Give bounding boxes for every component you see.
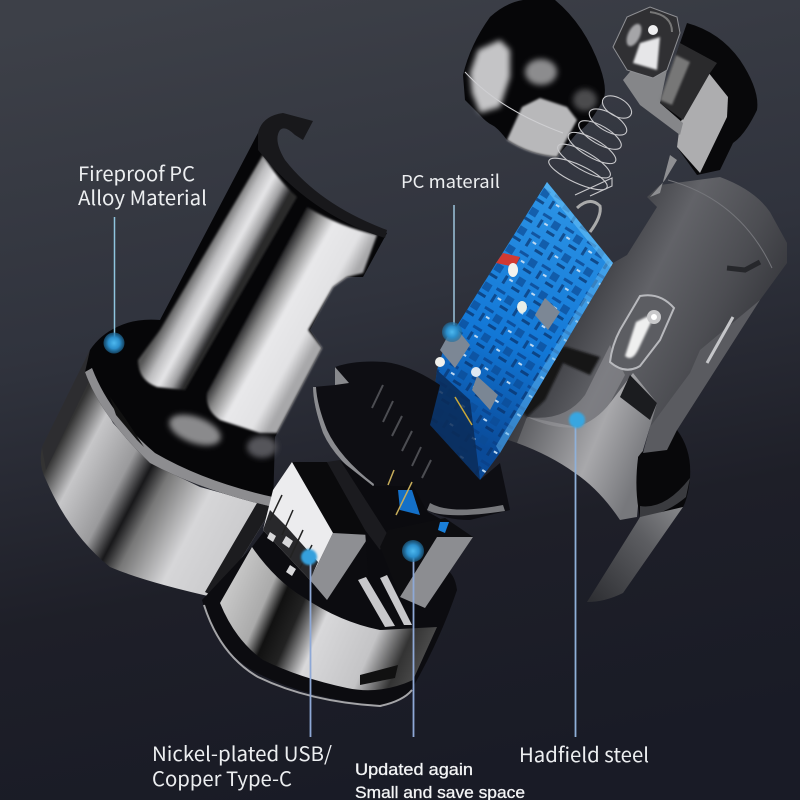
pin disc bbox=[313, 362, 510, 520]
callout: PC materail: PC materail bbox=[401, 168, 500, 194]
spring bbox=[545, 91, 635, 232]
left tube and base top surface bbox=[85, 113, 387, 507]
callout: Hadfield steel bbox=[519, 412, 649, 768]
callout: Nickel-plated USB / Copper Type-C bbox=[152, 549, 332, 792]
right metal shell bbox=[480, 177, 787, 602]
callout: PC materail bbox=[401, 168, 500, 342]
callout: Nickel-plated USB / Copper Type-C: Nickel-plated USB/ bbox=[152, 738, 332, 767]
callout: Nickel-plated USB / Copper Type-C: Copper Type-C bbox=[152, 763, 292, 792]
Type-C port bbox=[327, 460, 473, 627]
top left cap piece bbox=[463, 0, 605, 157]
left base body bbox=[41, 350, 273, 598]
callout: Fireproof PC Alloy Material: Alloy Material bbox=[78, 182, 207, 211]
USB port bbox=[263, 462, 370, 600]
callout: Updated again, Small and save space bbox=[355, 540, 525, 800]
metal bullet tip bbox=[613, 7, 680, 78]
callout: Fireproof PC Alloy Material: Fireproof PC bbox=[78, 158, 195, 187]
lower cap band bbox=[202, 530, 457, 706]
callout: Updated again, Small and save space: Updated again bbox=[355, 761, 473, 779]
callout: Hadfield steel: Hadfield steel bbox=[519, 739, 649, 768]
circuit board bbox=[430, 182, 613, 480]
top right cap piece bbox=[623, 23, 757, 197]
callout: Fireproof PC Alloy Material bbox=[78, 158, 207, 354]
bullet slot on shell bbox=[610, 295, 674, 370]
